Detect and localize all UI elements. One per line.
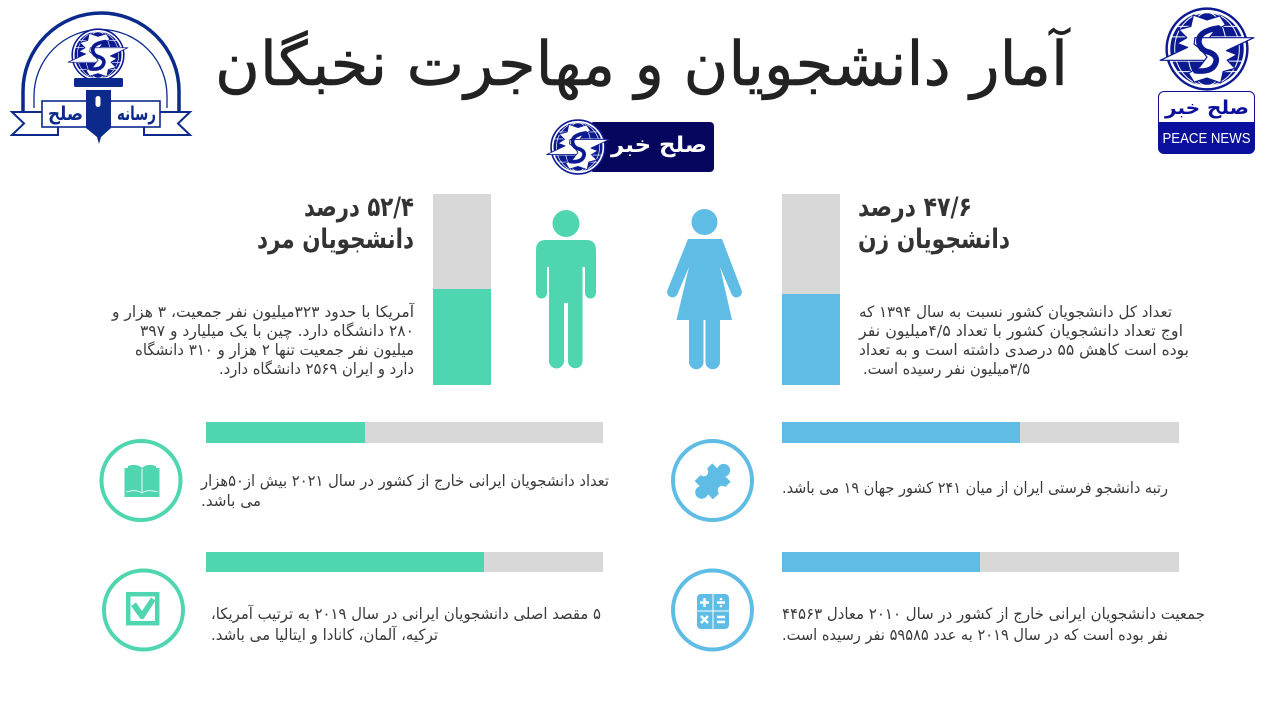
text: male paragraph	[111, 302, 415, 379]
chart: progress bar	[206, 422, 603, 443]
text: female paragraph: اوج تعداد دانشجویان کشور با تعداد ۴/۵میلیون نفر	[858, 322, 1183, 341]
text: destinations: ترکیه، آلمان، کانادا و ایتالیا می باشد.	[211, 625, 438, 645]
text: male paragraph: میلیون نفر جمعیت تنها ۲ هزار و ۳۱۰ دانشگاه	[135, 341, 414, 360]
icon: woman	[667, 209, 742, 369]
row: population abroad	[673, 552, 1205, 650]
text: destinations	[211, 604, 601, 645]
text: students abroad: تعداد دانشجویان ایرانی خارج از کشور در سال ۲۰۲۱ بیش از۵۰هزار	[200, 472, 609, 491]
panel: female students	[667, 192, 1189, 385]
heading: female share: ۴۷/۶ درصد	[858, 192, 972, 223]
heading: male share	[257, 192, 414, 255]
logo: solh khabar: صلح خبر	[610, 133, 707, 158]
panel: male students	[111, 192, 596, 385]
logo: rasaneh solh emblem: رسانه	[117, 103, 156, 125]
text: female paragraph: تعداد کل دانشجویان کشور نسبت به سال ۱۳۹۴ که	[859, 303, 1172, 321]
icon: man	[536, 210, 596, 368]
chart: female vertical bar	[782, 194, 840, 385]
text: female paragraph	[858, 303, 1189, 378]
text: male paragraph: ۲۸۰ دانشگاه دارد. چین با یک میلیارد و ۳۹۷	[140, 322, 414, 341]
text: world rank: رتبه دانشجو فرستی ایران از میان ۲۴۱ کشور جهان ۱۹ می باشد.	[782, 479, 1168, 498]
logo: rasaneh solh emblem	[12, 13, 190, 144]
text: students abroad: می باشد.	[201, 492, 261, 510]
icon: puzzle piece	[673, 441, 752, 520]
heading: male share: ۵۲/۴ درصد	[304, 192, 414, 223]
text: female paragraph: ۳/۵میلیون نفر رسیده است.	[863, 360, 1030, 378]
text: students abroad	[200, 472, 609, 510]
chart: progress bar	[206, 552, 603, 572]
text: female paragraph: بوده است کاهش ۵۵ درصدی داشته است و به تعداد	[859, 341, 1189, 360]
title: آمار دانشجویان و مهاجرت نخبگان	[215, 27, 1071, 100]
logo: solh khabar	[547, 120, 714, 174]
logo box: peace news label: PEACE NEWS	[1162, 131, 1250, 147]
heading: female share: دانشجویان زن	[858, 224, 1010, 255]
logo: rasaneh solh emblem: صلح	[48, 103, 83, 125]
icon: book	[102, 441, 180, 520]
chart: male vertical bar	[433, 194, 491, 385]
row: world rank	[673, 422, 1179, 520]
text: population abroad: جمعیت دانشجویان ایرانی خارج از کشور در سال ۲۰۱۰ معادل ۴۴۵۶۳	[782, 605, 1205, 624]
logo box: peace news label	[1158, 91, 1255, 154]
heading: female share	[858, 192, 1010, 255]
heading: male share: دانشجویان مرد	[257, 224, 414, 255]
text: population abroad: نفر بوده است که در سال ۲۰۱۹ به عدد ۵۹۵۸۵ نفر رسیده است.	[782, 626, 1168, 644]
logo box: peace news label: صلح خبر	[1164, 97, 1249, 119]
text: male paragraph: آمریکا با حدود ۳۲۳میلیون نفر جمعیت، ۳ هزار و	[111, 302, 415, 322]
chart: progress bar	[782, 422, 1179, 443]
text: male paragraph: دارد و ایران ۲۵۶۹ دانشگاه دارد.	[219, 360, 414, 379]
chart: progress bar	[782, 552, 1179, 572]
logo: peace news	[1158, 9, 1255, 154]
text: population abroad	[782, 605, 1205, 644]
icon: checkbox	[104, 570, 183, 650]
row: students abroad	[102, 422, 609, 520]
text: destinations: ۵ مقصد اصلی دانشجویان ایرانی در سال ۲۰۱۹ به ترتیب آمریکا،	[211, 604, 601, 623]
icon: calculator	[673, 570, 752, 650]
row: destinations	[104, 552, 603, 650]
